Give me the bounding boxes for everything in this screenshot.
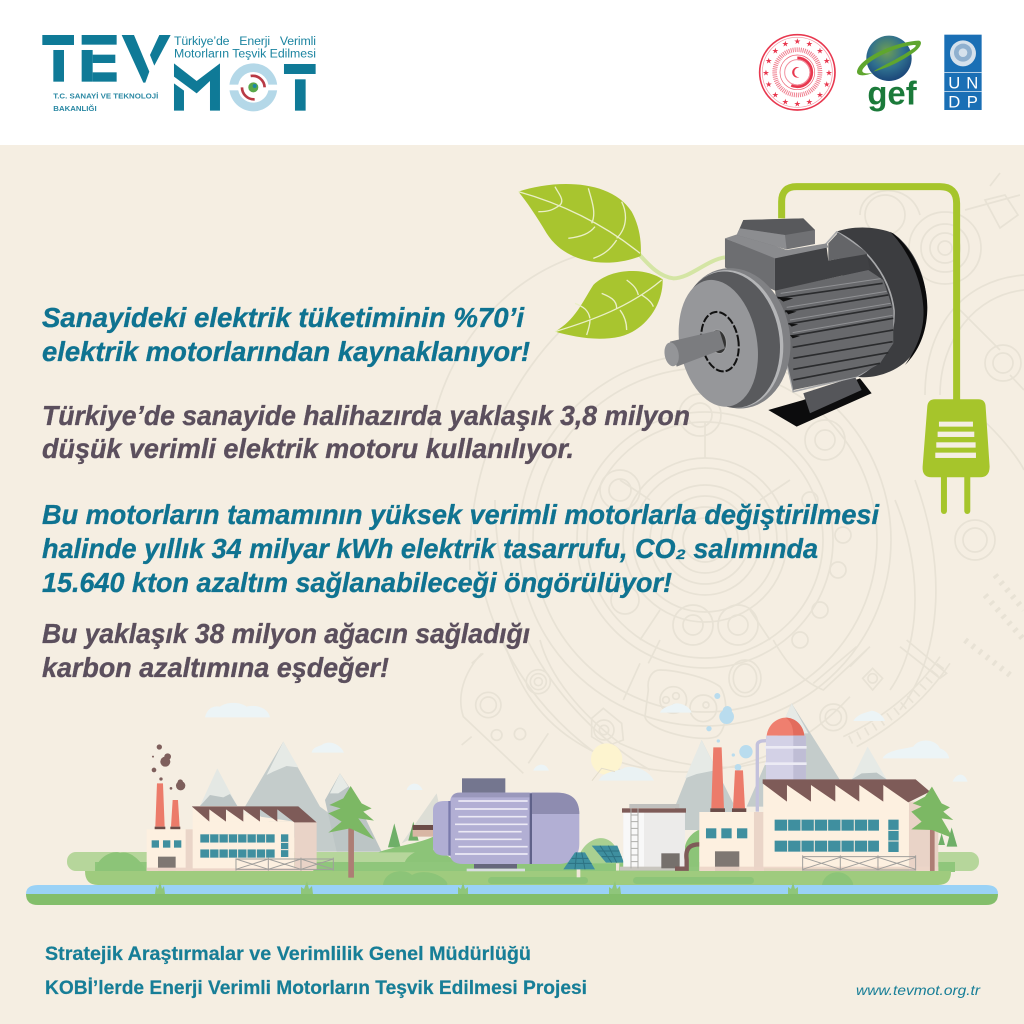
- fact: low efficiency motors: düşük verimli elektrik motoru kullanılıyor.: [42, 433, 574, 464]
- leaf stem: [638, 253, 725, 278]
- right factory scene: [533, 693, 968, 884]
- footer organisation names: Stratejik Araştırmalar ve Verimlilik Genel Müdürlüğü: [45, 944, 531, 965]
- UNDP logo: [944, 35, 982, 111]
- ministry name: BAKANLIĞI: [53, 104, 97, 113]
- far bush: [823, 874, 853, 884]
- TEV wordmark: [42, 35, 171, 83]
- left factory scene: [147, 703, 453, 884]
- front flange: [669, 259, 801, 417]
- GEF logo: gef: [867, 76, 918, 113]
- water tower: [757, 718, 807, 812]
- fact: savings: halinde yıllık 34 milyar kWh elektrik tasarrufu, CO₂ salımında: [42, 533, 818, 564]
- ministry seal: ★: [782, 40, 789, 49]
- clouds: [205, 703, 423, 790]
- ministry seal: ★: [806, 40, 813, 49]
- leaf top: [518, 184, 641, 263]
- MOT wordmark: [174, 63, 316, 111]
- bushes: [383, 849, 453, 884]
- mountains: [675, 703, 887, 830]
- lower art: [461, 640, 950, 773]
- central electric motor: [433, 778, 579, 871]
- footer organisation names: [45, 944, 587, 999]
- fact: low efficiency motors: Türkiye’de sanayide halihazırda yaklaşık 3,8 milyon: [42, 400, 690, 431]
- steam puffs: [706, 693, 753, 771]
- green filler behind factory: [685, 830, 699, 867]
- motor shaft: [663, 328, 728, 367]
- clouds and sun: [533, 703, 968, 782]
- pipe: [675, 844, 700, 869]
- ministry seal: ★: [825, 68, 833, 77]
- fact: savings: Bu motorların tamamının yüksek verimli motorlarla değiştirilmesi: [42, 499, 880, 530]
- motor illustration with leaves and plug: [518, 184, 990, 514]
- distant hill and house: [378, 825, 433, 852]
- ministry seal: ★: [765, 57, 772, 66]
- storage building: [620, 804, 687, 871]
- headline text block: [42, 302, 880, 683]
- tagline: Türkiye’de Enerji Verimli: [174, 34, 316, 48]
- UNDP logo: P: [967, 92, 978, 111]
- motor feet: [768, 377, 872, 427]
- fact: share of consumption: elektrik motorlarından kaynaklanıyor!: [42, 336, 530, 367]
- fence: [803, 855, 916, 871]
- pine trees: [328, 786, 419, 878]
- fact: savings: [42, 499, 880, 598]
- power cable: [782, 187, 957, 403]
- background mechanical line art: [430, 173, 1024, 773]
- fact: low efficiency motors: [42, 400, 690, 464]
- GEF logo: [857, 36, 921, 113]
- fact: savings: 15.640 kton azaltım sağlanabileceği öngörülüyor!: [42, 567, 672, 598]
- top right gears: [909, 212, 981, 284]
- chimneys and smoke: [152, 744, 185, 829]
- ministry seal: ★: [772, 46, 779, 55]
- mountains: [200, 742, 443, 852]
- ministry seal: ★: [823, 57, 830, 66]
- small factory building: [147, 829, 313, 871]
- ministry seal: ★: [816, 46, 824, 55]
- river and bank: [26, 881, 998, 905]
- logo: TEVMOT: [42, 34, 316, 113]
- ministry seal: ★: [816, 90, 824, 99]
- ministry name: [53, 91, 158, 113]
- chimneys: [710, 747, 746, 812]
- header band: [0, 0, 1024, 145]
- solar panels: [563, 838, 624, 877]
- UNDP logo: N: [966, 73, 978, 92]
- ministry seal: ★: [823, 80, 830, 89]
- large factory: [699, 779, 938, 871]
- tagline: [174, 34, 316, 60]
- pine tree: [911, 787, 957, 871]
- right hatch: [965, 575, 1024, 675]
- fact: tree equivalence: karbon azaltımına eşdeğer!: [42, 652, 389, 683]
- ministry seal: ★: [794, 100, 801, 109]
- motor rear cover: [837, 227, 927, 377]
- ministry seal: ★: [782, 97, 789, 106]
- terminal box: [725, 218, 870, 291]
- grass tufts: [155, 881, 798, 894]
- main factory: [192, 806, 317, 870]
- fact: share of consumption: [42, 302, 530, 367]
- ministry seal: ★: [794, 37, 801, 46]
- UNDP logo: U: [948, 73, 960, 92]
- footer organisation names: KOBİ’lerde Enerji Verimli Motorların Teşvik Edilmesi Projesi: [45, 978, 587, 999]
- tagline: Motorların Teşvik Edilmesi: [174, 46, 316, 60]
- ministry seal: ★: [772, 90, 779, 99]
- motor finned body: [773, 232, 894, 392]
- website: www.tevmot.org.tr: [856, 982, 981, 998]
- fact: tree equivalence: [42, 618, 530, 683]
- landscape ground: back strips: [67, 852, 979, 885]
- plug: [923, 399, 990, 514]
- ministry seal: ★: [762, 68, 770, 77]
- UNDP logo: D: [948, 92, 960, 111]
- ministry name: T.C. SANAYİ VE TEKNOLOJİ: [53, 91, 158, 100]
- ministry seal: [760, 35, 835, 110]
- ministry seal: ★: [806, 97, 813, 106]
- ministry seal: ★: [765, 80, 772, 89]
- fact: tree equivalence: Bu yaklaşık 38 milyon ağacın sağladığı: [42, 618, 530, 649]
- leaf bottom: [555, 271, 663, 339]
- fence: [236, 858, 333, 871]
- fact: share of consumption: Sanayideki elektrik tüketiminin %70’i: [42, 302, 525, 333]
